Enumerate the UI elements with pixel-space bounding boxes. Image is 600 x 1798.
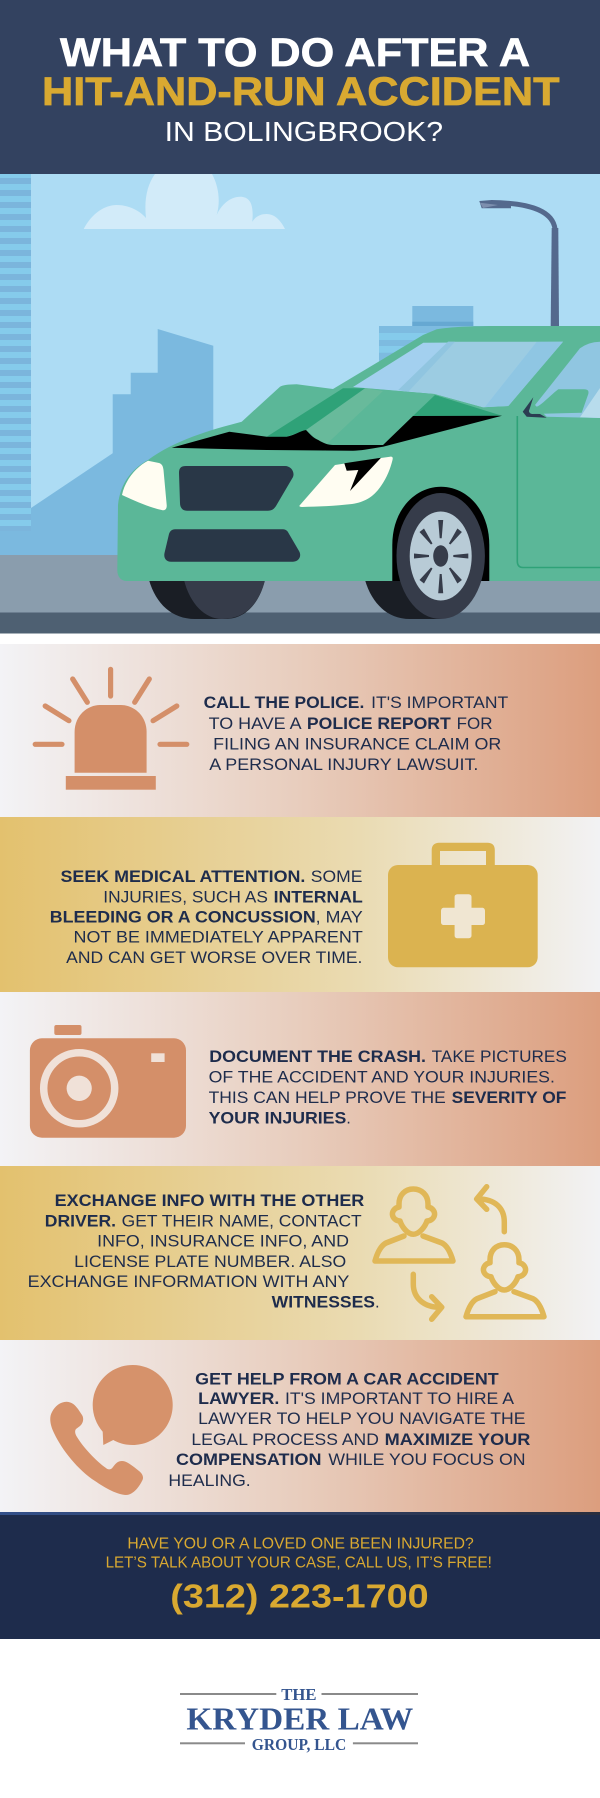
text: get help from a lawyer: MAXIMIZE YOUR <box>385 1430 530 1449</box>
call to action text <box>106 1535 492 1571</box>
text: call the police: TO HAVE A <box>209 714 303 733</box>
side mirror <box>529 389 589 414</box>
text: call the police <box>204 693 508 774</box>
logo: the kryder law group: KRYDER LAW <box>186 1700 413 1736</box>
text: exchange info: EXCHANGE INFO WITH THE OTHER <box>55 1191 364 1210</box>
text: exchange info: DRIVER. <box>45 1211 116 1230</box>
middle building <box>0 329 213 555</box>
header banner <box>0 0 600 174</box>
side window <box>523 342 600 418</box>
text: call the police: FILING AN INSURANCE CLAIM OR <box>213 734 501 753</box>
icon: first aid kit <box>388 843 538 967</box>
arrow down right <box>413 1274 442 1319</box>
text: call the police: CALL THE POLICE. <box>204 693 364 712</box>
text: document the crash <box>209 1047 567 1127</box>
road <box>0 555 600 634</box>
rear tyre shadow <box>365 580 441 619</box>
text: get help from a lawyer: GET HELP FROM A CAR ACCIDENT <box>195 1369 499 1388</box>
right building <box>379 306 509 376</box>
hero illustration: damaged car in city <box>0 174 600 634</box>
street lamp <box>479 200 559 326</box>
text: seek medical attention: AND CAN GET WORSE OVER TIME. <box>66 948 362 967</box>
text: get help from a lawyer: IT'S IMPORTANT TO HIRE A <box>285 1389 515 1408</box>
crumpled hood <box>172 388 502 451</box>
car <box>117 326 600 619</box>
text: seek medical attention: NOT BE IMMEDIATELY APPARENT <box>74 928 363 947</box>
person two <box>466 1245 544 1317</box>
right headlight <box>299 457 393 507</box>
wheel arch <box>392 487 489 581</box>
text: call the police: FOR <box>457 714 493 733</box>
text: exchange info: INFO, INSURANCE INFO, AND <box>97 1231 349 1250</box>
text: document the crash: DOCUMENT THE CRASH. <box>209 1047 426 1066</box>
text: get help from a lawyer: HEALING. <box>168 1471 251 1490</box>
panel: exchange info <box>0 1166 600 1340</box>
left building <box>0 174 31 531</box>
panel: seek medical attention <box>0 817 600 992</box>
text: seek medical attention: SEEK MEDICAL ATTENTION. <box>60 867 305 886</box>
title <box>42 31 560 147</box>
arrow up left <box>477 1187 504 1232</box>
text: seek medical attention: SOME <box>311 867 362 886</box>
door outline <box>517 416 600 568</box>
text: seek medical attention: , MAY <box>316 907 363 926</box>
text: exchange info: WITNESSES <box>272 1293 375 1312</box>
icon: people exchanging information <box>375 1187 544 1319</box>
icon: camera <box>30 1025 186 1138</box>
text: exchange info: LICENSE PLATE NUMBER. ALSO <box>74 1252 346 1271</box>
text: document the crash: OF THE ACCIDENT AND YOUR INJURIES. <box>209 1067 555 1086</box>
text: get help from a lawyer: LEGAL PROCESS AND <box>191 1430 379 1449</box>
wheel <box>396 493 485 619</box>
text: document the crash: TAKE PICTURES <box>432 1047 567 1066</box>
text: get help from a lawyer <box>168 1369 530 1490</box>
icon: siren <box>35 669 187 790</box>
person one <box>375 1189 453 1261</box>
text: call the police: POLICE REPORT <box>307 714 451 733</box>
text: seek medical attention: BLEEDING OR A CONCUSSION <box>50 907 316 926</box>
car body <box>117 326 600 581</box>
text: call the police: IT'S IMPORTANT <box>371 693 508 712</box>
panel: call the police <box>0 644 600 817</box>
text: get help from a lawyer: WHILE YOU FOCUS ON <box>328 1450 526 1469</box>
text: exchange info: EXCHANGE INFORMATION WITH ANY <box>28 1272 349 1291</box>
phone number: (312) 223-1700 <box>170 1577 429 1614</box>
text: exchange info: . <box>375 1293 380 1312</box>
title: WHAT TO DO AFTER A <box>60 31 530 75</box>
icon: phone and speech bubble <box>50 1365 173 1495</box>
title: IN BOLINGBROOK? <box>165 116 443 147</box>
panel: document the crash <box>0 992 600 1166</box>
call to action text: LET’S TALK ABOUT YOUR CASE, CALL US, IT’S FREE! <box>106 1554 492 1571</box>
text: get help from a lawyer: COMPENSATION <box>176 1450 322 1469</box>
text: get help from a lawyer: LAWYER. <box>198 1389 279 1408</box>
call to action band <box>0 1512 600 1639</box>
text: get help from a lawyer: LAWYER TO HELP YOU NAVIGATE THE <box>198 1409 525 1428</box>
text: document the crash: THIS CAN HELP PROVE THE <box>209 1088 446 1107</box>
panel: get help from a lawyer <box>0 1340 600 1512</box>
left headlight <box>122 461 167 510</box>
text: seek medical attention <box>50 867 363 967</box>
front tyre <box>149 580 265 619</box>
text: exchange info: GET THEIR NAME, CONTACT <box>122 1211 362 1230</box>
logo: the kryder law group: THE <box>281 1685 317 1704</box>
text: call the police: A PERSONAL INJURY LAWSUIT. <box>209 755 478 774</box>
grille <box>179 466 294 511</box>
text: exchange info <box>28 1191 380 1312</box>
lower grille <box>164 529 300 562</box>
text: document the crash: YOUR INJURIES <box>209 1108 346 1127</box>
text: seek medical attention: INTERNAL <box>274 887 363 906</box>
logo: the kryder law group: GROUP, LLC <box>252 1735 346 1754</box>
windshield <box>353 342 563 407</box>
text: document the crash: SEVERITY OF <box>452 1088 566 1107</box>
call to action text: HAVE YOU OR A LOVED ONE BEEN INJURED? <box>127 1535 474 1552</box>
logo: the kryder law group <box>180 1685 418 1754</box>
cloud <box>84 174 285 229</box>
title: HIT-AND-RUN ACCIDENT <box>42 70 560 114</box>
text: document the crash: . <box>346 1108 351 1127</box>
text: seek medical attention: INJURIES, SUCH AS <box>103 887 268 906</box>
